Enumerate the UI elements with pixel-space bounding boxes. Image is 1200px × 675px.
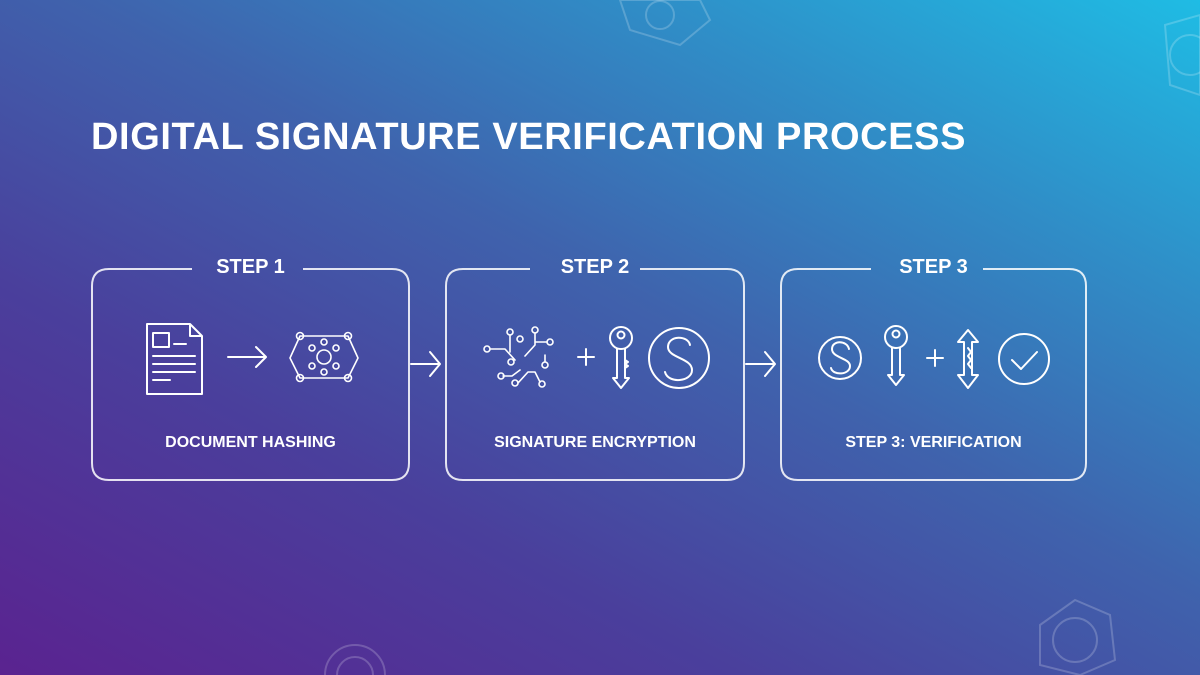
icon: check circle <box>999 334 1049 384</box>
step 3 label: STEP 3 <box>899 256 968 278</box>
step 1 label: STEP 1 <box>216 256 285 278</box>
icon: double arrow <box>958 330 978 388</box>
panel: step 1 <box>165 256 336 451</box>
caption: document hashing: DOCUMENT HASHING <box>165 434 336 451</box>
panel: step 3 <box>845 256 1022 451</box>
arrow <box>228 347 266 367</box>
icon: key <box>610 327 632 388</box>
caption: verification: STEP 3: VERIFICATION <box>845 434 1022 451</box>
icon: S circle <box>819 337 861 379</box>
icon: hash network <box>290 332 358 382</box>
icon: S signature <box>649 328 709 388</box>
arrow 2-3 <box>746 352 775 376</box>
icon: key 2 <box>885 326 907 385</box>
title: DIGITAL SIGNATURE VERIFICATION PROCESS <box>91 116 966 158</box>
plus <box>578 349 594 365</box>
step 2 label: STEP 2 <box>561 256 629 278</box>
icon: document <box>147 324 202 394</box>
panel: step 2 <box>494 256 696 451</box>
caption: signature encryption: SIGNATURE ENCRYPTION <box>494 434 696 451</box>
arrow 1-2 <box>411 352 440 376</box>
plus <box>927 350 943 366</box>
icon: circuit <box>484 327 553 387</box>
